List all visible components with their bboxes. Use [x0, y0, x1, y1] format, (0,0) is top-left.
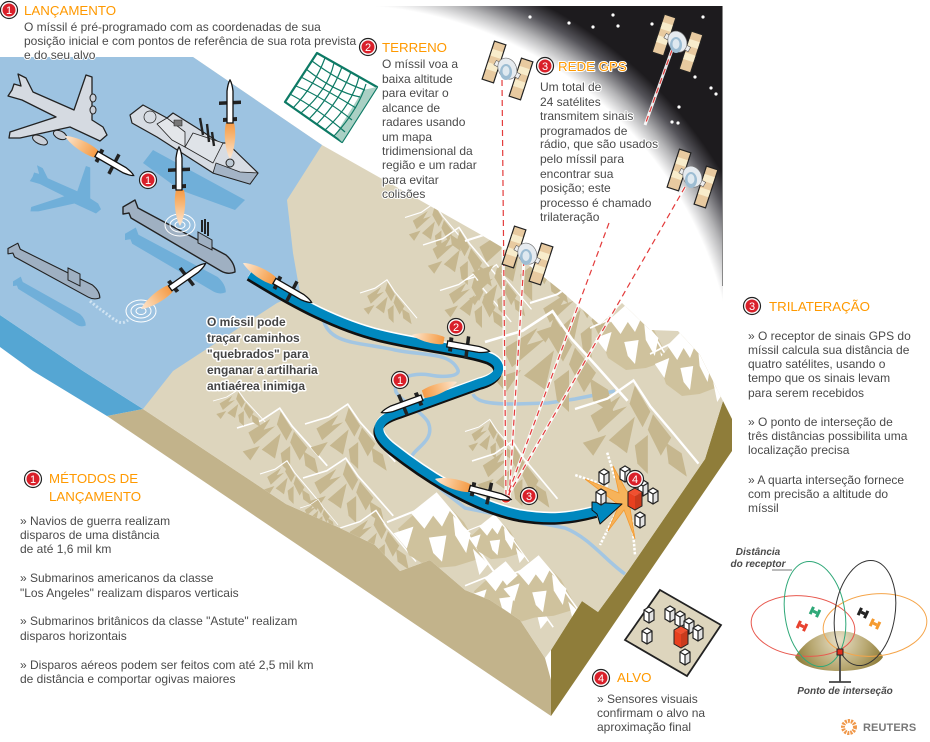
text: rede gps: pelo míssil para: [540, 152, 624, 166]
ship shadow: [143, 150, 245, 210]
text: rede gps: rádio, que são usados: [540, 137, 658, 151]
text: trilateração: tempo que os sinais levam: [748, 371, 890, 385]
text: rede gps: trilateração: [540, 210, 600, 224]
reuters logo: [843, 721, 916, 734]
text: terreno: colisões: [382, 187, 425, 201]
explosion at target: [575, 452, 635, 555]
terrain block sides: [0, 315, 732, 716]
map number markers: 2: [453, 322, 459, 334]
text: rede gps: transmitem sinais: [540, 109, 633, 123]
text: terreno: [382, 57, 477, 201]
callout: caminhos quebrados: "quebrados" para: [207, 347, 309, 361]
text: rede gps: 24 satélites: [540, 95, 601, 109]
target buildings: [596, 466, 658, 528]
submarine vertical launcher: [123, 200, 235, 273]
submarine horizontal launcher: [8, 243, 128, 323]
callout: caminhos quebrados: antiaérea inimiga: [207, 379, 305, 393]
text: trilateração: míssil: [748, 501, 779, 515]
text: alvo: confirmam o alvo na: [597, 706, 705, 720]
heading: terreno: TERRENO: [382, 40, 447, 55]
text: rede gps: programados de: [540, 124, 628, 138]
warship: [130, 105, 258, 184]
cruise missiles: [91, 80, 514, 510]
text: terreno: radares usando: [382, 115, 466, 129]
terrain surface with sea: [0, 57, 723, 658]
text: métodos de lançamento: de até 1,6 mil km: [20, 542, 111, 556]
aircraft shadow: [30, 165, 101, 214]
text: métodos de lançamento: » Disparos aéreos podem ser feitos com até 2,5 mil km: [20, 658, 313, 672]
heading: alvo: ALVO: [617, 670, 652, 685]
heading: lançamento: 1: [6, 5, 12, 17]
trilateration diagram: do receptor: [730, 559, 787, 570]
text: rede gps: posição; este: [540, 181, 611, 195]
launch water rings: [126, 159, 234, 322]
map number markers: 3: [526, 491, 532, 503]
icon: terrain grid map: [285, 53, 377, 142]
text: trilateração: [748, 329, 911, 515]
text: rede gps: processo é chamado: [540, 196, 652, 210]
text: trilateração: quatro satélites, usando o: [748, 357, 886, 371]
deep space sky: [340, 6, 723, 401]
rivers: [323, 318, 625, 574]
text: terreno: região e um radar: [382, 158, 477, 172]
text: terreno: para evitar o: [382, 86, 449, 100]
inset: target area: [625, 590, 721, 676]
trilateration diagram: Distância: [736, 547, 781, 558]
heading: lançamento: LANÇAMENTO: [24, 3, 116, 18]
text: trilateração: » A quarta interseção fornece: [748, 473, 904, 487]
text: lançamento: e do seu alvo: [24, 48, 96, 62]
heading: métodos de lançamento: [24, 470, 141, 504]
text: terreno: um mapa: [382, 130, 432, 144]
heading: rede gps: 3: [542, 61, 548, 73]
callout: caminhos quebrados: [207, 315, 318, 393]
text: trilateração: com precisão a altitude do: [748, 487, 888, 501]
reuters logo: REUTERS: [863, 722, 916, 734]
text: lançamento: O míssil é pré-programado com as coordenadas de sua: [24, 20, 321, 34]
text: trilateração: » O receptor de sinais GPS do: [748, 329, 911, 343]
heading: alvo: 4: [598, 673, 604, 685]
map number markers: 1: [145, 175, 151, 187]
heading: métodos de lançamento: MÉTODOS DE: [49, 471, 138, 486]
map number markers: 4: [632, 474, 638, 486]
text: terreno: tridimensional da: [382, 144, 473, 158]
heading: trilateração: TRILATERAÇÃO: [769, 299, 870, 314]
heading: rede gps: REDE GPS: [558, 59, 627, 74]
missile trajectory arrow: [249, 272, 622, 524]
mountains: [213, 203, 728, 629]
text: lançamento: [24, 20, 357, 62]
text: métodos de lançamento: de distância e comportar ogivas maiores: [20, 672, 235, 686]
text: rede gps: Um total de: [540, 80, 602, 94]
text: alvo: [597, 692, 705, 734]
text: métodos de lançamento: » Submarinos britânicos da classe "Astute" realizam: [20, 614, 297, 628]
bomber aircraft: [8, 74, 107, 147]
text: trilateração: três distâncias possibilita uma: [748, 429, 908, 443]
flames: [62, 123, 471, 493]
text: métodos de lançamento: "Los Angeles" realizam disparos verticais: [20, 586, 239, 600]
map number markers: 1: [397, 375, 403, 387]
text: terreno: O míssil voa a: [382, 57, 458, 71]
text: trilateração: localização precisa: [748, 443, 850, 457]
map number markers: [140, 172, 644, 504]
GPS signal lines: [501, 50, 685, 503]
heading: rede gps: [536, 58, 627, 74]
heading: terreno: [360, 38, 447, 56]
heading: trilateração: 3: [749, 301, 755, 313]
callout: caminhos quebrados: traçar caminhos: [207, 331, 300, 345]
text: rede gps: encontrar sua: [540, 167, 614, 181]
text: métodos de lançamento: disparos de uma distância: [20, 528, 160, 542]
text: trilateração: para serem recebidos: [748, 386, 864, 400]
text: métodos de lançamento: disparos horizontais: [20, 629, 127, 643]
heading: terreno: 2: [365, 42, 371, 54]
callout: caminhos quebrados: enganar a artilharia: [207, 363, 318, 377]
text: terreno: alcance de: [382, 101, 440, 115]
text: trilateração: míssil calcula sua distância de: [748, 343, 910, 357]
GPS satellites: [482, 14, 718, 285]
text: terreno: para evitar: [382, 173, 439, 187]
heading: alvo: [592, 670, 652, 686]
text: alvo: aproximação final: [597, 720, 691, 734]
text: métodos de lançamento: » Submarinos americanos da classe: [20, 571, 214, 585]
submarine shadows: [13, 228, 226, 326]
text: métodos de lançamento: » Navios de guerra realizam: [20, 514, 170, 528]
heading: métodos de lançamento: LANÇAMENTO: [49, 489, 141, 504]
trilateration diagram: [730, 547, 930, 697]
trilateration diagram: Ponto de interseção: [797, 686, 893, 697]
heading: métodos de lançamento: 1: [30, 474, 36, 486]
text: terreno: baixa altitude: [382, 72, 453, 86]
text: métodos de lançamento: [20, 514, 313, 686]
text: trilateração: » O ponto de interseção de: [748, 415, 893, 429]
text: lançamento: posição inicial e com pontos de referência de sua rota prevista: [24, 34, 357, 48]
callout: caminhos quebrados: O míssil pode: [207, 315, 286, 329]
text: alvo: » Sensores visuais: [597, 692, 698, 706]
text: rede gps: [540, 80, 658, 224]
